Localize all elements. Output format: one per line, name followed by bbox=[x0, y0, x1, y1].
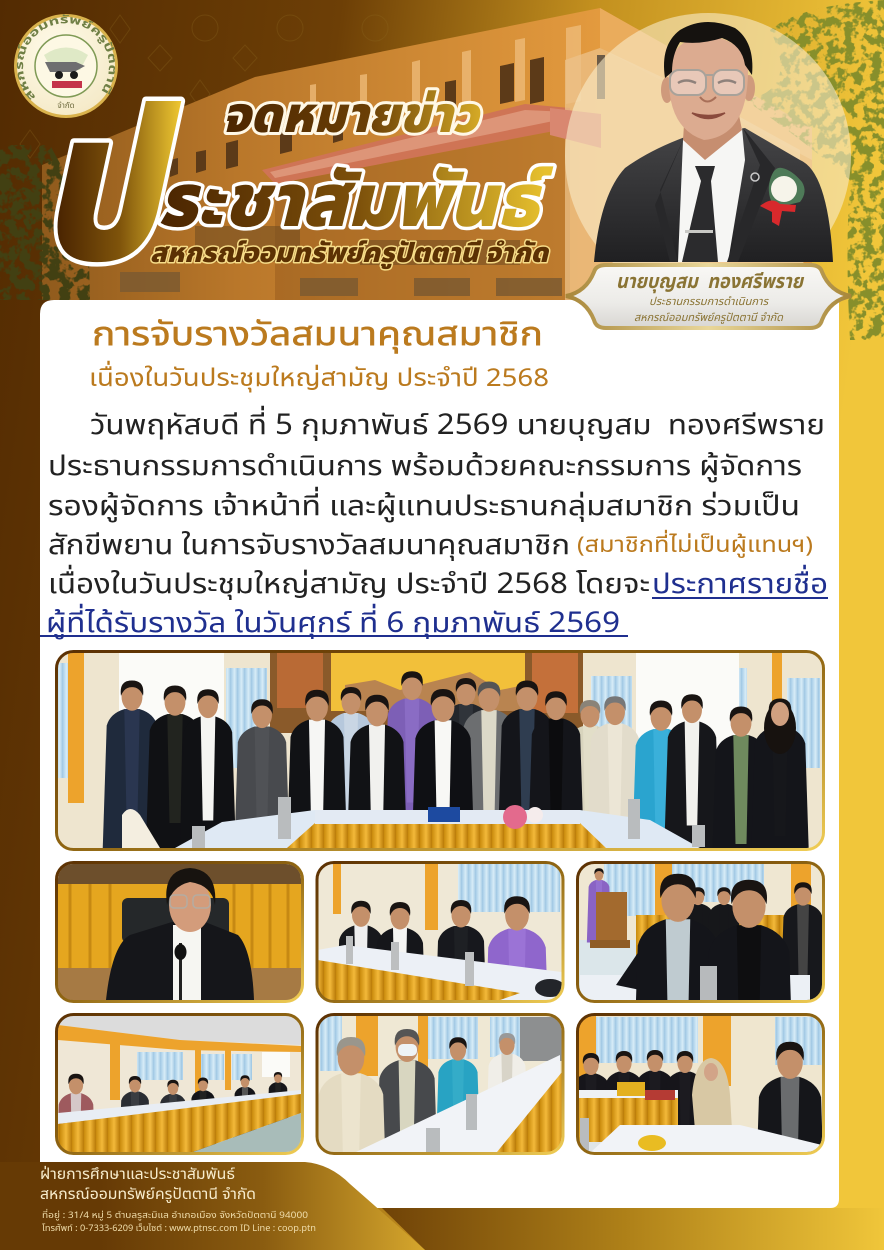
shirt bbox=[678, 128, 745, 262]
face bbox=[669, 36, 748, 140]
article body: ประกาศรายชื่อ bbox=[652, 563, 828, 606]
chairman name: นายบุญสม ทองศรีพราย bbox=[616, 267, 804, 297]
article body: (สมาชิกที่ไม่เป็นผู้แทนฯ) bbox=[577, 529, 813, 562]
title line 1: จดหมายข่าว bbox=[222, 79, 482, 155]
address: ที่อยู่ : 31/4 หมู่ 5 ตำบลรูสะมิแล อำเภอเมือง จังหวัดปัตตานี 94000 bbox=[42, 1208, 308, 1223]
portrait: chairman bbox=[594, 22, 833, 262]
article body: วันพฤหัสบดี ที่ 5 กุมภาพันธ์ 2569 นายบุญสม ทองศรีพราย bbox=[90, 404, 825, 447]
ground floor windows bbox=[120, 272, 562, 296]
neck bbox=[683, 110, 742, 160]
tie bbox=[682, 166, 718, 262]
portrait backing circle bbox=[565, 13, 851, 299]
ears bbox=[661, 77, 673, 103]
tree left bbox=[0, 145, 90, 300]
upper floor windows bbox=[170, 57, 544, 177]
big letter: ป bbox=[38, 35, 181, 355]
article body: ประธานกรรมการดำเนินการ พร้อมด้วยคณะกรรมการ ผู้จัดการ bbox=[48, 445, 802, 488]
hair bbox=[664, 22, 752, 78]
header photo: school building bbox=[0, 8, 812, 300]
photo: staff group at table bbox=[576, 1013, 825, 1155]
photo: attendees along long table bbox=[316, 1013, 564, 1155]
header title block bbox=[38, 35, 554, 355]
footer bottom band bbox=[382, 1208, 884, 1250]
upper floor pillars bbox=[310, 25, 581, 116]
smile bbox=[692, 113, 725, 118]
title line 3: สหกรณ์ออมทรัพย์ครูปัตตานี จำกัด bbox=[150, 234, 550, 275]
logo seal bbox=[14, 14, 118, 118]
building body bbox=[42, 8, 812, 300]
article body: เนื่องในวันประชุมใหญ่สามัญ ประจำปี 2568 โดยจะ bbox=[48, 563, 650, 606]
white content panel bbox=[40, 300, 839, 1208]
back row bbox=[330, 687, 372, 810]
title line 2: ระชาสัมพันธ์ bbox=[158, 148, 554, 260]
header ornament pattern bbox=[20, 15, 388, 158]
photo: group portrait bbox=[55, 650, 825, 851]
name plate bbox=[566, 265, 851, 328]
cooperative name: สหกรณ์ออมทรัพย์ครูปัตตานี จำกัด bbox=[40, 1183, 256, 1206]
suit bbox=[594, 128, 833, 262]
article body: ผู้ที่ได้รับรางวัล ในวันศุกร์ ที่ 6 กุมภาพันธ์ 2569 bbox=[46, 602, 620, 645]
photo: chairman at table bbox=[56, 862, 302, 1002]
contact details: โทรศัพท์ : 0-7333-6209 เว็บไซต์ : www.ptnsc.com ID Line : coop.ptn bbox=[42, 1222, 316, 1236]
photo: two men near podium bbox=[576, 861, 825, 1003]
department name: ฝ่ายการศึกษาและประชาสัมพันธ์ bbox=[40, 1163, 235, 1186]
article subheading: เนื่องในวันประชุมใหญ่สามัญ ประจำปี 2568 bbox=[89, 360, 549, 398]
table bbox=[175, 810, 700, 848]
awning bbox=[262, 104, 570, 184]
glasses bbox=[670, 70, 744, 95]
lapels bbox=[655, 128, 775, 262]
chairman position: ประธานกรรมการดำเนินการ bbox=[649, 293, 770, 310]
photo: wide meeting room bbox=[55, 1013, 304, 1155]
front row bbox=[102, 680, 156, 848]
chairman organisation: สหกรณ์ออมทรัพย์ครูปัตตานี จำกัด bbox=[634, 309, 784, 326]
nose and eyes bbox=[700, 97, 716, 102]
logo ring lettering: สหกรณ์ออมทรัพย์ครูปัตตานี bbox=[16, 14, 116, 100]
article body: รองผู้จัดการ เจ้าหน้าที่ และผู้แทนประธานกลุ่มสมาชิก ร่วมเป็น bbox=[48, 485, 800, 528]
right wing of building bbox=[565, 48, 800, 300]
awning on right wing bbox=[550, 108, 601, 148]
right side tree bbox=[745, 0, 884, 340]
article heading: การจับรางวัลสมนาคุณสมาชิก bbox=[92, 310, 543, 360]
shaded lower storey bbox=[275, 128, 570, 300]
photo: four attendees at table bbox=[316, 861, 564, 1003]
corsage bbox=[751, 168, 805, 226]
article body bbox=[40, 404, 828, 645]
logo seal: จำกัด bbox=[57, 100, 75, 112]
article body: สักขีพยาน ในการจับรางวัลสมนาคุณสมาชิก bbox=[48, 524, 570, 567]
footer contact block bbox=[0, 1162, 425, 1250]
roof soffit bbox=[600, 8, 812, 160]
